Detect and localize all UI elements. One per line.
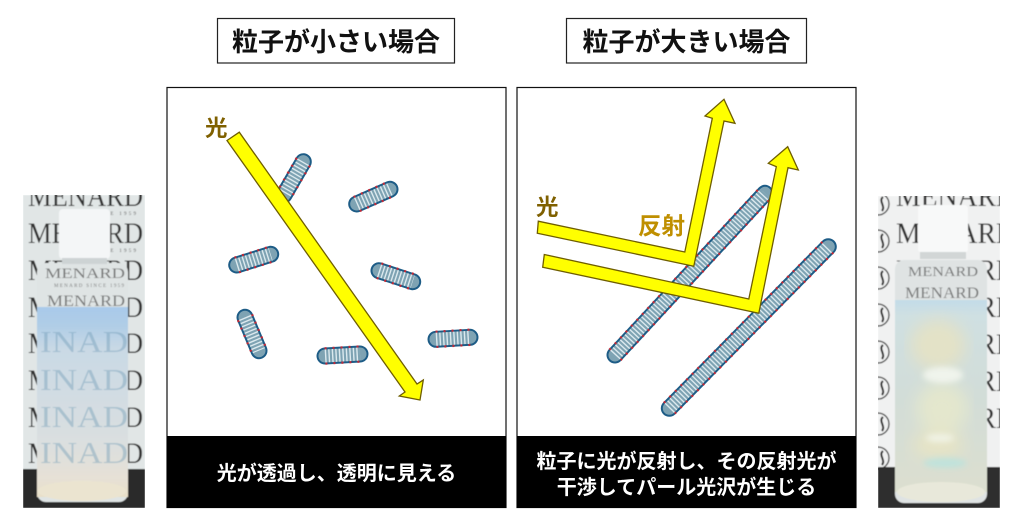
photo: transparent bottle: MENARD bbox=[28, 217, 143, 250]
label: light: 光 bbox=[536, 195, 559, 220]
photo: transparent bottle: MENARD bbox=[47, 293, 125, 310]
photo: pearl bottle: MENARD bbox=[896, 254, 1016, 287]
caption bar: 光が透過し、透明に見える bbox=[217, 461, 456, 485]
photo: pearl bottle: MENARD bbox=[896, 402, 1016, 435]
photo: transparent bottle: INAD bbox=[40, 399, 128, 434]
photo: transparent bottle: MENARD bbox=[28, 180, 143, 213]
panel: small particles bbox=[167, 88, 506, 508]
arrow: transmitted light bbox=[227, 132, 423, 400]
photo: transparent bottle: JAPAN SINCE 1959 bbox=[60, 212, 136, 217]
photo: transparent bottle: MENARD bbox=[28, 254, 143, 287]
photo: transparent bottle: MENARD bbox=[28, 364, 143, 397]
panel: large particles bbox=[517, 88, 856, 508]
caption bar bbox=[517, 436, 856, 508]
photo: pearl bottle: MENARD bbox=[896, 365, 1016, 398]
photo: transparent bottle: MENARD bbox=[28, 437, 143, 470]
photo: transparent bottle: JAPAN SINCE 1959 bbox=[60, 249, 136, 254]
label: light: 光 bbox=[205, 116, 228, 141]
panel frame bbox=[517, 88, 856, 508]
arrow: reflected light upper bbox=[537, 99, 735, 266]
photo: transparent bottle: INAD bbox=[40, 435, 128, 470]
arrow: reflected light lower bbox=[543, 147, 798, 313]
label: reflection: 反射 bbox=[638, 213, 685, 239]
photo: transparent bottle: MENARD bbox=[28, 327, 143, 360]
caption bar: 粒子に光が反射し、その反射光が bbox=[536, 449, 836, 473]
photo: pearl bottle: MENARD bbox=[896, 217, 1016, 250]
photo: transparent bottle: MENARD bbox=[28, 401, 143, 434]
photo: pearl bottle: MENARD bbox=[905, 285, 979, 302]
photo: pearl bottle: MENARD bbox=[896, 180, 1016, 213]
caption bar bbox=[167, 436, 506, 508]
caption bar: 干渉してパール光沢が生じる bbox=[557, 475, 816, 499]
photo: pearl bottle bbox=[878, 196, 1000, 508]
photo: transparent bottle bbox=[23, 180, 145, 508]
particles: long rods bbox=[615, 193, 828, 408]
photo: transparent bottle: INAD bbox=[40, 362, 128, 397]
photo: transparent bottle: MENARD SINCE 1959 bbox=[54, 284, 124, 289]
photo: pearl bottle: MENARD bbox=[896, 291, 1016, 324]
heading: large particles bbox=[566, 18, 806, 63]
photo: transparent bottle: INAD bbox=[40, 324, 128, 359]
heading: large particles: 粒子が大きい場合 bbox=[582, 27, 791, 57]
photo: transparent bottle: MENARD bbox=[28, 291, 143, 324]
photo: transparent bottle: MENARD bbox=[45, 266, 125, 282]
heading: small particles: 粒子が小さい場合 bbox=[232, 27, 440, 57]
heading: small particles bbox=[218, 18, 454, 63]
photo: pearl bottle: MENARD bbox=[908, 265, 978, 280]
particles: small rods bbox=[237, 162, 470, 356]
panel frame bbox=[167, 88, 506, 508]
photo: pearl bottle: MENARD bbox=[896, 328, 1016, 361]
